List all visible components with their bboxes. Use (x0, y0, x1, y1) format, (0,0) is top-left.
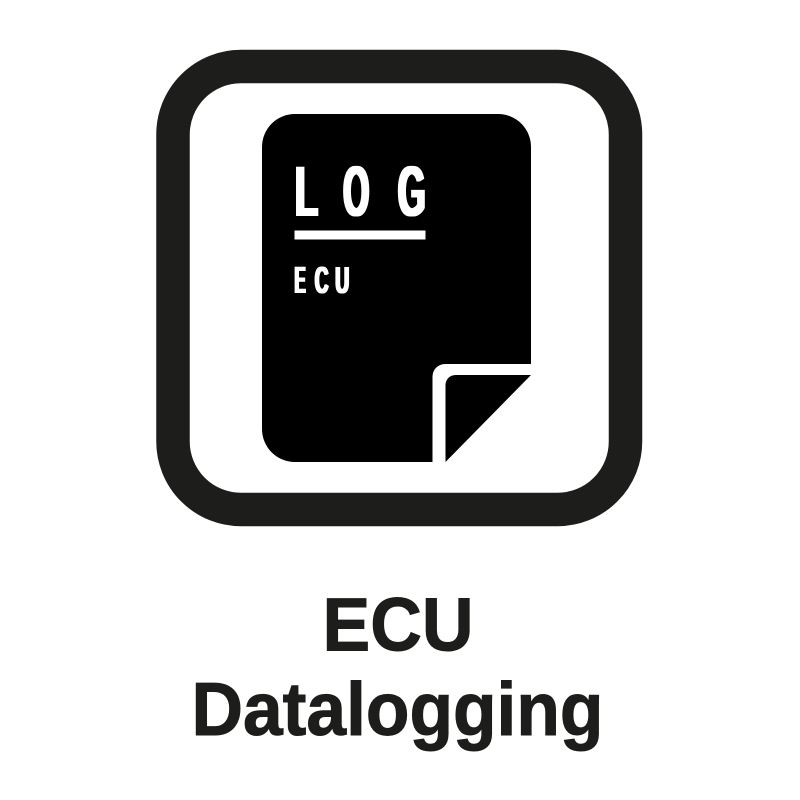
title (192, 582, 604, 751)
document label: ECU (294, 259, 349, 302)
document heading: LOG (295, 151, 426, 232)
folded corner (446, 375, 531, 462)
title line 1: ECU (322, 582, 474, 666)
document label: ECU: E (294, 259, 306, 302)
icon: log document (262, 114, 531, 462)
document heading: LOG: O (343, 152, 369, 231)
document label: ECU: C (315, 260, 329, 302)
document heading: LOG: L (295, 154, 318, 232)
icon: rounded frame (173, 66, 626, 510)
title line 2: Datalogging (192, 667, 604, 751)
document page with folded corner notch (262, 114, 531, 462)
document heading: LOG: G (398, 151, 426, 231)
document label: ECU: U (335, 260, 349, 302)
document heading underline (294, 230, 426, 240)
